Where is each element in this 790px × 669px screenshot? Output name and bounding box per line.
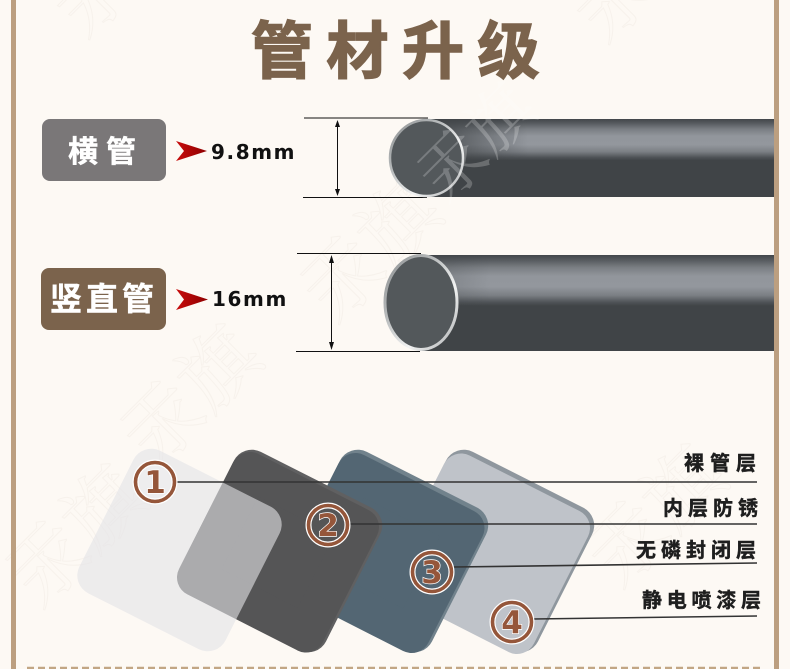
dimension marker: horizontal tube	[303, 118, 428, 198]
label: vertical tube	[41, 268, 166, 330]
label: bare tube layer: 裸管层	[684, 447, 756, 476]
layer 3: phosphorus-free sealing coat	[302, 470, 468, 634]
size: 16mm: 16mm	[212, 287, 288, 311]
leader line 3	[453, 563, 757, 567]
right border bar	[774, 0, 779, 669]
layer 2: inner rust protection	[196, 470, 362, 634]
leader line 1	[177, 481, 757, 483]
marker 2: 2	[317, 508, 339, 544]
arrow: horizontal tube size	[176, 141, 207, 161]
label: horizontal tube: 横管	[68, 127, 144, 171]
marker 1	[136, 462, 174, 502]
marker 4: 4	[501, 605, 523, 641]
marker 2	[308, 506, 348, 544]
marker 4	[492, 602, 532, 642]
label: inner rust protection: 内层防锈	[663, 492, 758, 521]
watermarks: 汞旗	[92, 297, 282, 486]
marker 3: 3	[421, 555, 443, 591]
bottom dashed divider	[27, 667, 763, 669]
left border bar	[11, 0, 16, 669]
marker 1: 1	[144, 465, 166, 501]
title: 管材升级	[251, 1, 553, 91]
layer 1: bare tube	[97, 469, 262, 631]
dimension marker: vertical tube	[296, 253, 421, 352]
size: 9.8mm: 9.8mm	[211, 140, 296, 164]
arrow: vertical tube size	[176, 289, 208, 310]
label: static spray coat: 静电喷漆层	[642, 584, 761, 613]
watermarks: 汞旗	[272, 152, 462, 341]
label: vertical tube: 竖直管	[50, 274, 158, 320]
horizontal tube	[390, 58, 774, 218]
leader line 4	[533, 616, 757, 619]
layer 4: static spray coat	[407, 470, 574, 635]
watermarks: 汞旗	[557, 417, 747, 606]
leader line 2	[349, 523, 757, 525]
horizontal tube: 汞旗	[392, 58, 553, 218]
vertical tube	[385, 255, 774, 351]
label: horizontal tube	[42, 119, 166, 181]
label: phosphorus-free sealing: 无磷封闭层	[636, 534, 756, 563]
marker 3	[412, 552, 452, 592]
